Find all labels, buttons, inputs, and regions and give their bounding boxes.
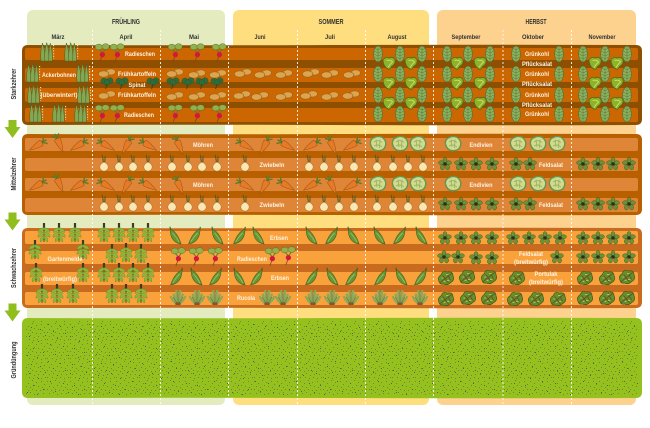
icons: Frühkartoffeln	[98, 69, 360, 100]
crop labels: Mittelzehrer: Feldsalat	[539, 162, 564, 169]
crop labels: Starkzehrer: Spinat	[128, 82, 146, 89]
crop labels: Starkzehrer: Ackerbohnen	[42, 72, 76, 79]
season and month headings: Mai	[189, 34, 199, 41]
crop labels: Starkzehrer	[40, 51, 553, 119]
crop labels: Starkzehrer: Grünkohl	[525, 71, 549, 78]
crop labels: Mittelzehrer: Endivien	[470, 142, 492, 149]
crop labels: Starkzehrer: Radieschen	[124, 112, 154, 119]
season panel: Herbst	[437, 10, 636, 405]
icons: Feldsalat	[439, 158, 635, 210]
crop labels: Schwachzehrer: Portulak	[534, 271, 558, 278]
arrow: Mittelzehrer to Schwachzehrer	[4, 212, 20, 230]
crop labels: Mittelzehrer: Möhren	[193, 142, 213, 149]
side label: Schwachzehrer: Schwachzehrer	[9, 248, 18, 288]
icons: Grünkohl	[374, 46, 631, 123]
arrow: Schwachzehrer to Gründüngung	[4, 304, 20, 322]
crop labels: Starkzehrer: Grünkohl	[525, 51, 549, 58]
crop labels: Starkzehrer: Pflücksalat	[522, 61, 553, 68]
crop labels: Starkzehrer: (überwintert)	[40, 92, 78, 99]
side label: Gründüngung: Gründüngung	[9, 342, 18, 378]
crop labels: Starkzehrer: Frühkartoffeln	[118, 92, 156, 99]
season and month headings: HERBST	[526, 19, 547, 26]
month dividers	[92, 30, 572, 404]
crop labels: Mittelzehrer: Zwiebeln	[260, 202, 284, 209]
crop labels: Mittelzehrer: Zwiebeln	[260, 162, 284, 169]
icons: Radieschen	[95, 44, 226, 123]
icons: Pflücksalat	[383, 57, 623, 109]
icons: Zwiebeln	[100, 155, 427, 211]
icons: Portulak	[438, 270, 635, 306]
side label: Starkzehrer: Starkzehrer	[9, 68, 18, 100]
crop labels: Starkzehrer: Frühkartoffeln	[118, 71, 156, 78]
season and month headings: FRÜHLING	[112, 17, 140, 26]
season and month headings: März	[52, 34, 65, 41]
icons: Gartenmelde	[29, 223, 154, 303]
crop labels: Starkzehrer: Grünkohl	[525, 92, 549, 99]
season and month headings: SOMMER	[318, 19, 344, 26]
crop labels: Schwachzehrer: (breitwürfig)	[43, 276, 77, 283]
crop labels: Starkzehrer: Radieschen	[125, 51, 155, 58]
season and month headings: November	[588, 34, 616, 41]
crop labels: Schwachzehrer: Erbsen	[271, 275, 289, 282]
side label: Mittelzehrer: Mittelzehrer	[9, 157, 18, 190]
crop labels: Starkzehrer: Grünkohl	[525, 111, 549, 118]
arrow: Starkzehrer to Mittelzehrer	[4, 120, 20, 138]
crop labels: Schwachzehrer: Erbsen	[270, 235, 288, 242]
icons: Feldsalat	[438, 232, 635, 264]
crop labels: Mittelzehrer: Endivien	[470, 182, 492, 189]
crop labels: Schwachzehrer: (breitwürfig)	[514, 259, 548, 266]
crop labels: Schwachzehrer: (breitwürfig)	[529, 279, 563, 286]
crop labels: Schwachzehrer	[43, 235, 563, 302]
icons: Rucola	[171, 290, 427, 305]
icons: Radieschen	[171, 247, 295, 266]
crop labels: Schwachzehrer: Feldsalat	[519, 251, 544, 258]
icons: Möhren	[27, 132, 363, 196]
crop labels: Schwachzehrer: Rucola	[237, 295, 255, 302]
bed: Mittelzehrer	[22, 132, 642, 215]
season and month headings	[52, 17, 616, 41]
icons: Erbsen	[167, 226, 429, 288]
season and month headings: Juli	[325, 34, 335, 41]
crop labels: Schwachzehrer: Radieschen	[237, 256, 267, 263]
season and month headings: August	[388, 34, 407, 41]
crop labels: Starkzehrer: Pflücksalat	[522, 102, 553, 109]
season and month headings: September	[452, 34, 481, 41]
icons: Spinat	[101, 78, 223, 89]
crop labels: Starkzehrer: Pflücksalat	[522, 81, 553, 88]
icons: Endivien	[370, 136, 565, 191]
icons: Ackerbohnen	[27, 42, 91, 122]
season and month headings: Juni	[254, 34, 266, 41]
season and month headings: Oktober	[522, 34, 544, 41]
crop labels: Mittelzehrer	[193, 142, 564, 209]
bed: Gründüngung	[22, 318, 642, 398]
crop labels: Schwachzehrer: Gartenmelde	[48, 256, 83, 263]
season and month headings: April	[120, 34, 133, 41]
season panel: Frühling	[27, 10, 225, 405]
bed: Schwachzehrer	[22, 223, 642, 308]
crop labels: Mittelzehrer: Feldsalat	[539, 202, 564, 209]
crop labels: Mittelzehrer: Möhren	[193, 182, 213, 189]
season panel: Sommer	[233, 10, 429, 405]
bed: Starkzehrer	[22, 42, 642, 125]
